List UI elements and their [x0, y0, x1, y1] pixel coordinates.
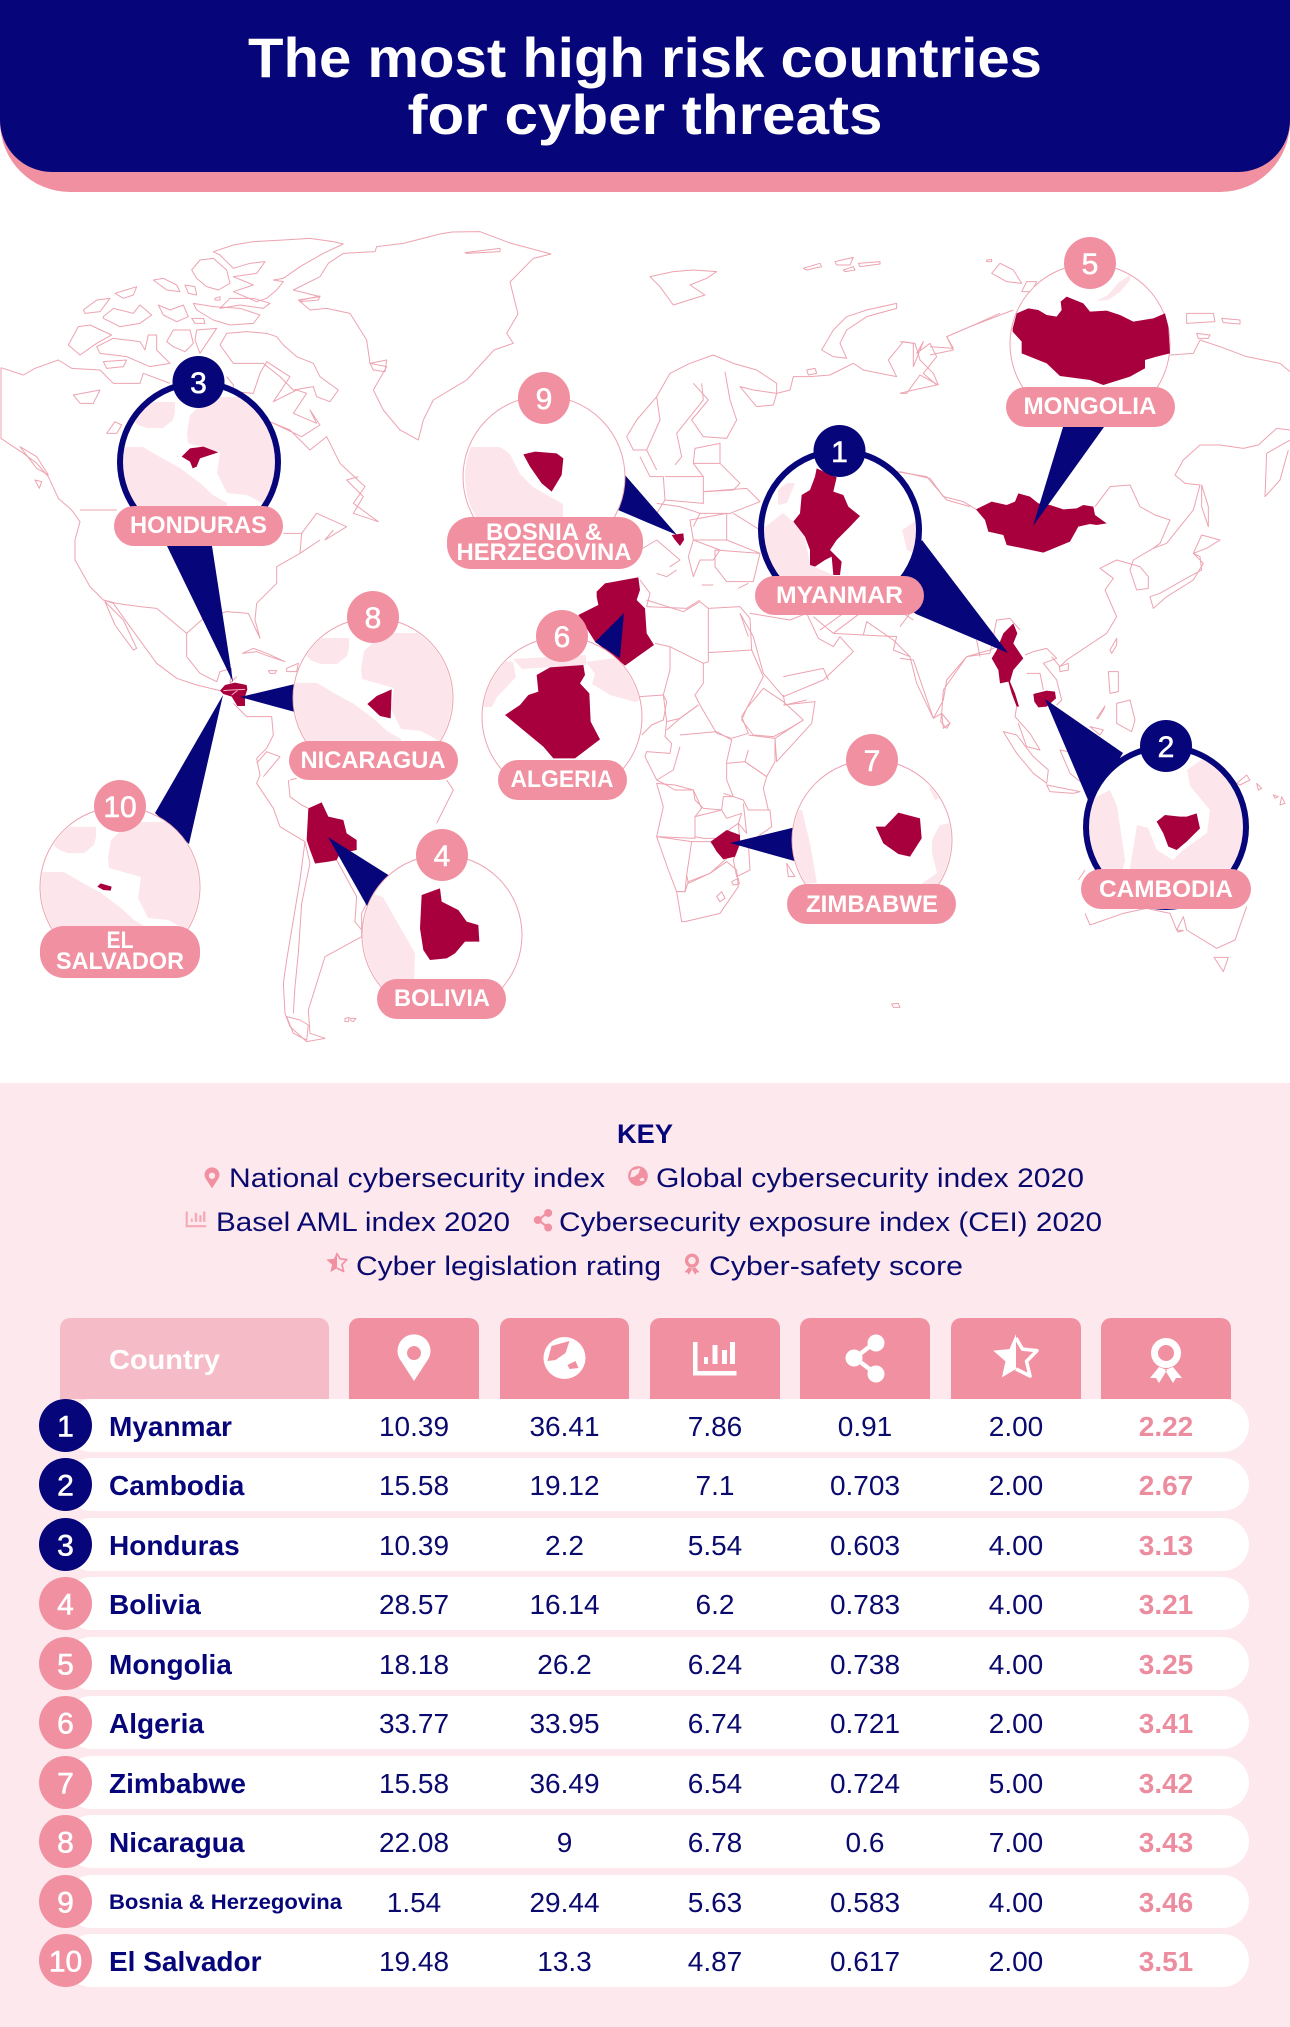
badge: 3 [172, 356, 224, 408]
row 2: Cambodia [39, 1458, 1249, 1511]
lens: Mongolia [1010, 268, 1170, 388]
row 5: Mongolia: 3.25 [1139, 1649, 1193, 1680]
row 2: Cambodia: Cambodia [109, 1470, 245, 1501]
row 6: Algeria [39, 1696, 1249, 1749]
label: Myanmar [755, 576, 924, 615]
map highlight: Myanmar [992, 623, 1023, 707]
row 8: Nicaragua: Nicaragua [109, 1827, 245, 1858]
map highlight: Central America [220, 683, 247, 706]
pointer: Mongolia [1033, 427, 1104, 526]
lens: Bosnia [462, 400, 626, 517]
row 2: Cambodia: 2 [57, 1470, 74, 1502]
key: National cybersecurity index: National cybersecurity index [229, 1163, 606, 1193]
row 5: Mongolia: 4.00 [989, 1649, 1043, 1680]
marker: Cambodia [1045, 699, 1256, 909]
key: Basel AML index 2020: Basel AML index 2020 [216, 1207, 510, 1237]
badge: 5: 5 [1082, 248, 1098, 281]
key: Global cybersecurity index 2020: Global cybersecurity index 2020 [656, 1163, 1084, 1193]
row 3: Honduras: 10.39 [379, 1530, 449, 1561]
row 7: Zimbabwe: 5.00 [989, 1768, 1043, 1799]
row 3: Honduras: 0.603 [830, 1530, 900, 1561]
country shape: El Salvador [97, 883, 112, 891]
row 3: Honduras: 5.54 [688, 1530, 742, 1561]
country shape: Honduras [182, 447, 218, 468]
badge: 9: 9 [536, 383, 552, 416]
marker: Nicaragua [240, 591, 463, 780]
title: for cyber threats [408, 83, 882, 146]
marker: Myanmar [750, 425, 1008, 653]
panel: key and table background [0, 1083, 1290, 2027]
row 7: Zimbabwe: 0.724 [830, 1768, 900, 1799]
lens: Zimbabwe [792, 764, 952, 884]
marker: Honduras [109, 356, 289, 682]
row 10: El Salvador: 3.51 [1139, 1946, 1193, 1977]
label: Zimbabwe [787, 884, 956, 924]
badge: 4 [416, 829, 468, 881]
badge: 8: 8 [365, 602, 381, 635]
row 9: Bosnia and Herzegovina: 29.44 [529, 1887, 600, 1918]
row 10: El Salvador: 13.3 [537, 1946, 592, 1977]
marker: Mongolia [1006, 237, 1175, 526]
row 1: Myanmar: 36.41 [529, 1411, 600, 1442]
pointer: Bosnia [618, 475, 677, 535]
lens: Honduras [117, 384, 281, 507]
row 3: Honduras: 3 [57, 1530, 74, 1562]
pointer: Honduras [167, 546, 233, 682]
row 4: Bolivia: 16.14 [529, 1589, 600, 1620]
row 8: Nicaragua: 7.00 [989, 1827, 1043, 1858]
row 1: Myanmar: Myanmar [109, 1411, 232, 1442]
row 8: Nicaragua: 3.43 [1139, 1827, 1193, 1858]
row 5: Mongolia: 0.738 [830, 1649, 900, 1680]
row 8: Nicaragua [39, 1815, 1249, 1868]
badge: 2 [1140, 720, 1192, 772]
label: El Salvador: EL [106, 927, 134, 954]
lens: Myanmar [758, 452, 922, 576]
row 9: Bosnia and Herzegovina: 4.00 [989, 1887, 1043, 1918]
row 7: Zimbabwe: 15.58 [379, 1768, 449, 1799]
country shape: Algeria [505, 665, 600, 758]
header icon: bar chart [650, 1318, 780, 1399]
marker: Algeria [482, 610, 642, 800]
row 6: Algeria: 2.00 [989, 1708, 1043, 1739]
key: Cyber legislation rating: Cyber legislation rating [356, 1251, 661, 1281]
row 3: Honduras [39, 1518, 1249, 1571]
row 8: Nicaragua: 9 [557, 1827, 572, 1858]
badge: 7 [846, 734, 898, 786]
row 10: El Salvador [39, 1934, 1249, 1987]
badge: 6 [536, 610, 588, 662]
row 2: Cambodia: 19.12 [529, 1470, 600, 1501]
row 2: Cambodia: 2.67 [1139, 1470, 1193, 1501]
header icon: location pin [349, 1318, 479, 1399]
row 5: Mongolia: 6.24 [688, 1649, 742, 1680]
row 9: Bosnia and Herzegovina: 9 [57, 1886, 74, 1920]
country shape: Mongolia [1013, 297, 1170, 385]
row 4: Bolivia: 0.783 [830, 1589, 900, 1620]
country shape: Bolivia [420, 888, 479, 960]
row 3: Honduras: 2.2 [545, 1530, 584, 1561]
map highlight: Algeria [578, 577, 654, 666]
row 4: Bolivia: 3.21 [1139, 1589, 1193, 1620]
label: Myanmar: MYANMAR [776, 582, 903, 609]
row 6: Algeria: 6.74 [688, 1708, 742, 1739]
label: El Salvador [40, 926, 200, 978]
badge: 1 [814, 425, 866, 477]
marker: Bosnia and Herzegovina [447, 372, 677, 569]
label: Mongolia: MONGOLIA [1024, 393, 1156, 420]
badge: 7: 7 [864, 745, 880, 778]
marker: Zimbabwe [730, 734, 962, 924]
row 6: Algeria: 0.721 [830, 1708, 900, 1739]
row 7: Zimbabwe [39, 1756, 1249, 1809]
pointer: El Salvador [155, 695, 223, 844]
country shape: Nicaragua [367, 689, 392, 718]
country shape: Cambodia [1157, 813, 1200, 850]
label: Honduras: HONDURAS [130, 512, 267, 539]
row 7: Zimbabwe: 7 [57, 1768, 74, 1800]
row 4: Bolivia [39, 1577, 1249, 1630]
badge: 9 [518, 372, 570, 424]
badge: 10: 10 [103, 791, 137, 824]
label: Cambodia [1081, 869, 1251, 909]
header banner [0, 0, 1290, 192]
row 2: Cambodia: 7.1 [696, 1470, 734, 1501]
marker: Bolivia [328, 829, 522, 1019]
label: Algeria [498, 760, 627, 800]
badge: 4: 4 [434, 840, 450, 873]
pointer: Cambodia [1045, 699, 1123, 800]
row 1: Myanmar [39, 1399, 1249, 1452]
pointer: Myanmar [880, 540, 1008, 653]
row 6: Algeria: 33.95 [529, 1708, 600, 1739]
lens: Nicaragua [292, 622, 454, 742]
row 7: Zimbabwe: 3.42 [1139, 1768, 1193, 1799]
row 10: El Salvador: 2.00 [989, 1946, 1043, 1977]
map highlight: Cambodia [1033, 691, 1056, 707]
row 1: Myanmar: 10.39 [379, 1411, 449, 1442]
key: Cybersecurity exposure index (CEI) 2020: Cybersecurity exposure index (CEI) 2020 [559, 1207, 1102, 1237]
badge: 3: 3 [190, 367, 207, 400]
row 7: Zimbabwe: Zimbabwe [109, 1768, 246, 1799]
row 9: Bosnia and Herzegovina: 1.54 [387, 1887, 441, 1918]
pointer: Zimbabwe [730, 827, 798, 862]
world map outline [1, 232, 1290, 1042]
row 9: Bosnia and Herzegovina: Bosnia & Herzegovina [109, 1890, 343, 1914]
row 3: Honduras: Honduras [109, 1530, 240, 1561]
row 10: El Salvador: El Salvador [109, 1946, 262, 1977]
row 4: Bolivia: Bolivia [109, 1589, 201, 1620]
key: Cyber-safety score: Cyber-safety score [709, 1251, 963, 1281]
header icon: share [800, 1318, 930, 1399]
badge: 2: 2 [1158, 731, 1174, 764]
pointer: Bolivia [328, 837, 390, 906]
row 5: Mongolia [39, 1637, 1249, 1690]
label: Bolivia [377, 979, 506, 1019]
header icon: half star [951, 1318, 1081, 1399]
row 2: Cambodia: 0.703 [830, 1470, 900, 1501]
map highlight: Bosnia [672, 533, 684, 546]
pointer: Nicaragua [240, 684, 295, 712]
label: El Salvador: SALVADOR [56, 948, 184, 975]
title: The most high risk countries [248, 26, 1042, 89]
title [248, 26, 1042, 146]
row 9: Bosnia and Herzegovina [39, 1875, 1249, 1928]
row 5: Mongolia: 26.2 [537, 1649, 592, 1680]
label: Algeria: ALGERIA [510, 766, 614, 793]
row 4: Bolivia: 4 [57, 1588, 74, 1622]
map highlight: Bolivia [307, 802, 357, 863]
row 9: Bosnia and Herzegovina: 5.63 [688, 1887, 742, 1918]
label: Nicaragua [289, 741, 458, 780]
label: Bosnia and Herzegovina: HERZEGOVINA [456, 539, 632, 566]
row 8: Nicaragua: 8 [57, 1826, 74, 1860]
map highlight: Mongolia [976, 493, 1107, 553]
header icon: award [1101, 1318, 1231, 1399]
row 5: Mongolia: 5 [57, 1648, 74, 1682]
row 1: Myanmar: 2.22 [1139, 1411, 1193, 1442]
lens: Bolivia [362, 858, 522, 988]
row 4: Bolivia: 4.00 [989, 1589, 1043, 1620]
row 2: Cambodia: 15.58 [379, 1470, 449, 1501]
row 1: Myanmar: 0.91 [838, 1411, 892, 1442]
label: Bolivia: BOLIVIA [394, 985, 490, 1012]
header: Country: Country [109, 1344, 220, 1375]
table header [60, 1318, 1231, 1399]
row 10: El Salvador: 10 [49, 1946, 82, 1978]
header: Country [60, 1318, 329, 1399]
row 10: El Salvador: 19.48 [379, 1946, 449, 1977]
badge: 1: 1 [831, 436, 848, 469]
row 4: Bolivia: 28.57 [379, 1589, 449, 1620]
row 1: Myanmar: 2.00 [989, 1411, 1043, 1442]
row 10: El Salvador: 4.87 [688, 1946, 742, 1977]
row 4: Bolivia: 6.2 [696, 1589, 734, 1620]
row 10: El Salvador: 0.617 [830, 1946, 900, 1977]
row 6: Algeria: Algeria [109, 1708, 204, 1739]
row 7: Zimbabwe: 36.49 [529, 1768, 600, 1799]
label: Bosnia and Herzegovina: BOSNIA & [486, 519, 602, 546]
lens: El Salvador [40, 810, 200, 930]
row 6: Algeria: 33.77 [379, 1708, 449, 1739]
row 8: Nicaragua: 6.78 [688, 1827, 742, 1858]
country shape: Bosnia [523, 452, 563, 492]
row 6: Algeria: 3.41 [1139, 1708, 1193, 1739]
label: Cambodia: CAMBODIA [1099, 876, 1233, 903]
label: Honduras [114, 506, 283, 546]
pointer: Algeria [595, 613, 624, 658]
map highlight: Zimbabwe [711, 830, 740, 859]
label: Nicaragua: NICARAGUA [300, 747, 446, 774]
country shape: Myanmar [793, 468, 860, 575]
badge: 6: 6 [554, 621, 570, 654]
row 1: Myanmar: 7.86 [688, 1411, 742, 1442]
marker: El Salvador [30, 695, 223, 978]
row 1: Myanmar: 1 [57, 1410, 74, 1444]
row 6: Algeria: 6 [57, 1708, 74, 1740]
badge: 8 [347, 591, 399, 643]
label: Mongolia [1006, 387, 1175, 427]
lens: Cambodia [1076, 747, 1256, 907]
lens: Algeria [482, 640, 642, 770]
row 9: Bosnia and Herzegovina: 0.583 [830, 1887, 900, 1918]
row 5: Mongolia: Mongolia [109, 1649, 232, 1680]
label: Bosnia and Herzegovina [447, 517, 643, 569]
row 8: Nicaragua: 22.08 [379, 1827, 449, 1858]
label: Zimbabwe: ZIMBABWE [806, 891, 938, 918]
header icon: globe [500, 1318, 629, 1399]
row 8: Nicaragua: 0.6 [846, 1827, 884, 1858]
badge: 10 [94, 780, 146, 832]
row 5: Mongolia: 18.18 [379, 1649, 449, 1680]
key heading: KEY [617, 1119, 673, 1149]
row 7: Zimbabwe: 6.54 [688, 1768, 742, 1799]
country shape: Zimbabwe [876, 813, 922, 857]
row 2: Cambodia: 2.00 [989, 1470, 1043, 1501]
row 3: Honduras: 3.13 [1139, 1530, 1193, 1561]
badge: 5 [1064, 237, 1116, 289]
row 9: Bosnia and Herzegovina: 3.46 [1139, 1887, 1193, 1918]
row 3: Honduras: 4.00 [989, 1530, 1043, 1561]
